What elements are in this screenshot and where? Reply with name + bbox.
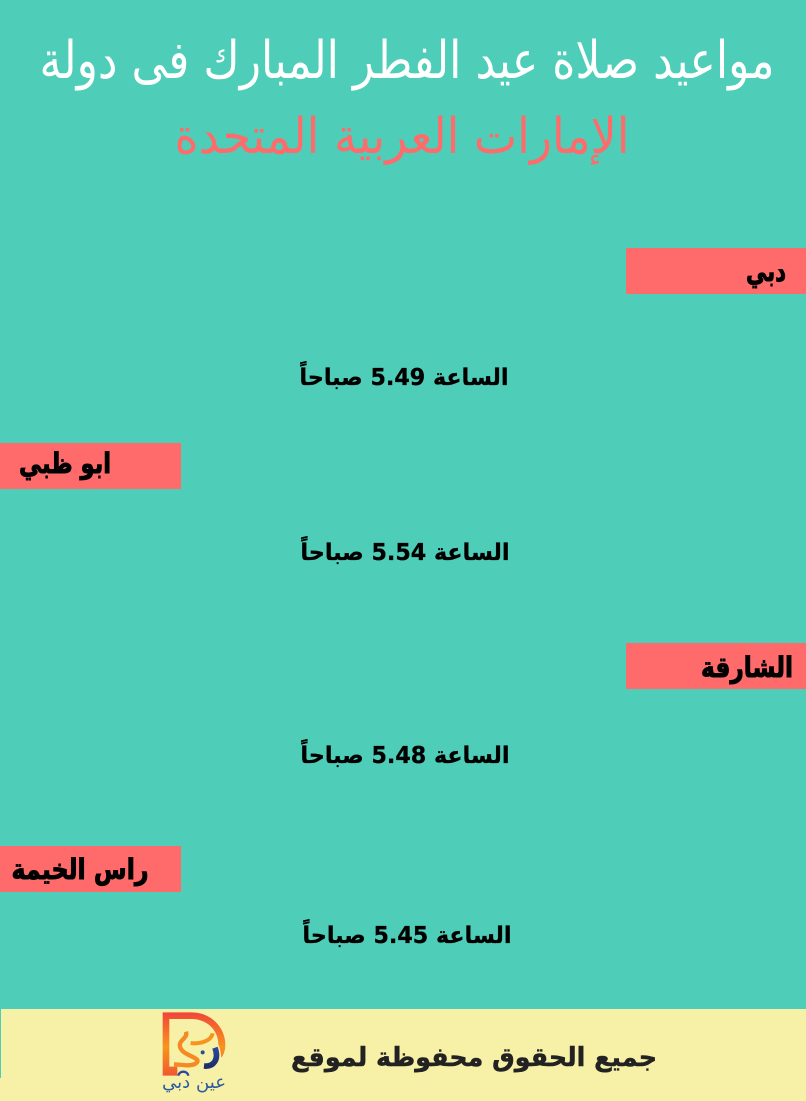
logo wordmark: عين دبي [162,1072,226,1093]
time: Abu Dhabi: الساعة 5.54 صباحاً [300,536,510,566]
subtitle: الإمارات العربية المتحدة [174,109,630,166]
label: Ras Al Khaimah [0,846,181,892]
time: Dubai: الساعة 5.49 صباحاً [300,361,508,391]
title: مواعيد صلاة عيد الفطر المبارك فى دولة [40,31,774,91]
label: Dubai [626,248,806,294]
label: Ras Al Khaimah: راس الخيمة [12,853,148,886]
label: Sharjah [626,643,806,689]
label: Dubai: دبي [746,255,786,288]
label: Abu Dhabi: ابو ظبي [19,447,111,480]
time: Sharjah: الساعة 5.48 صباحاً [300,739,510,769]
time: Ras Al Khaimah: الساعة 5.45 صباحاً [302,919,512,949]
footer text: جميع الحقوق محفوظة لموقع [291,1043,657,1073]
footer band [0,1009,806,1101]
label: Abu Dhabi [0,443,181,489]
icon: site logo [162,1012,226,1093]
